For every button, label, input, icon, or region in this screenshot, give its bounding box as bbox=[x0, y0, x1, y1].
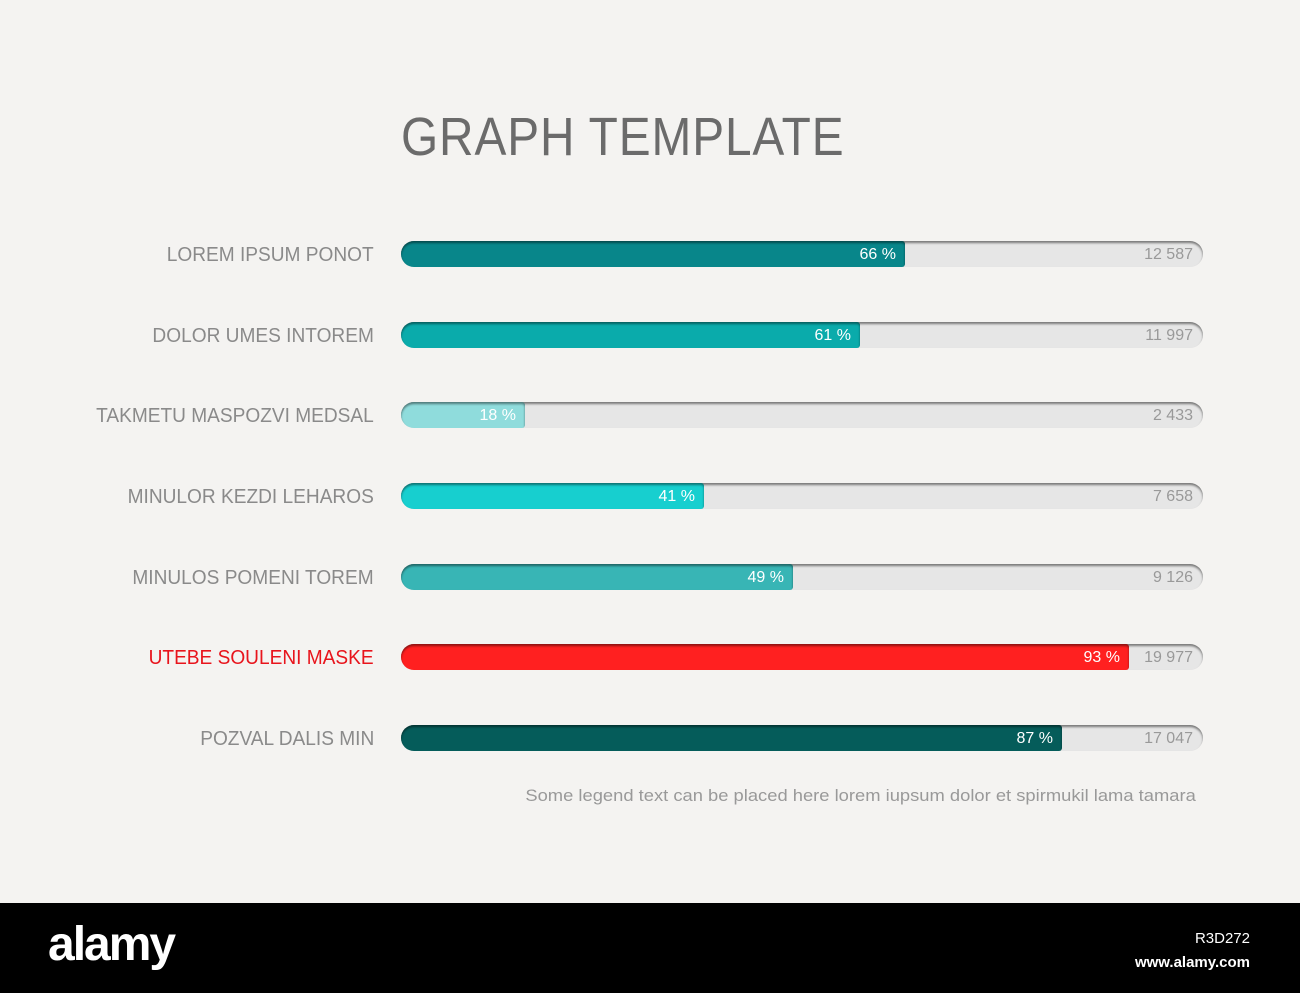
bar row 5 bbox=[401, 564, 1203, 590]
label row 3: TAKMETU MASPOZVI MEDSAL bbox=[96, 405, 374, 427]
label row 7: POZVAL DALIS MIN bbox=[200, 728, 374, 750]
footer id text bbox=[1135, 930, 1250, 971]
footer id text: www.alamy.com bbox=[1135, 954, 1250, 971]
bar row 6 highlighted: 93 % bbox=[1084, 649, 1120, 666]
title: GRAPH TEMPLATE bbox=[401, 107, 844, 167]
bar row 7: 87 % bbox=[1017, 730, 1053, 747]
bar row 3: 2 433 bbox=[1153, 407, 1193, 424]
bar row 1 bbox=[401, 241, 1203, 267]
footer id text: R3D272 bbox=[1195, 930, 1250, 947]
label row 2: DOLOR UMES INTOREM bbox=[153, 325, 374, 347]
bar row 4: 7 658 bbox=[1153, 488, 1193, 505]
bar row 6 highlighted bbox=[401, 644, 1203, 670]
footer strip bbox=[0, 903, 1300, 993]
bar row 4: 41 % bbox=[659, 488, 695, 505]
label row 6 highlighted: UTEBE SOULENI MASKE bbox=[149, 647, 374, 669]
label row 4: MINULOR KEZDI LEHAROS bbox=[128, 486, 374, 508]
footer logo: alamy bbox=[48, 918, 174, 971]
legend text: Some legend text can be placed here lorem iupsum dolor et spirmukil lama tamara bbox=[526, 786, 1196, 805]
bar row 2: 11 997 bbox=[1145, 327, 1193, 344]
bar row 2: 61 % bbox=[815, 327, 851, 344]
bar row 6 highlighted: 19 977 bbox=[1144, 649, 1193, 666]
bar row 7: 17 047 bbox=[1144, 730, 1193, 747]
bar row 1: 12 587 bbox=[1144, 246, 1193, 263]
bar row 5: 9 126 bbox=[1153, 569, 1193, 586]
label row 5: MINULOS POMENI TOREM bbox=[133, 567, 374, 589]
bar row 2 bbox=[401, 322, 1203, 348]
bar row 1: 66 % bbox=[860, 246, 896, 263]
bar row 7 bbox=[401, 725, 1203, 751]
label row 1: LOREM IPSUM PONOT bbox=[167, 244, 374, 266]
bar row 5: 49 % bbox=[748, 569, 784, 586]
bar row 3 bbox=[401, 402, 1203, 428]
bar row 3: 18 % bbox=[480, 407, 516, 424]
bar row 4 bbox=[401, 483, 1203, 509]
